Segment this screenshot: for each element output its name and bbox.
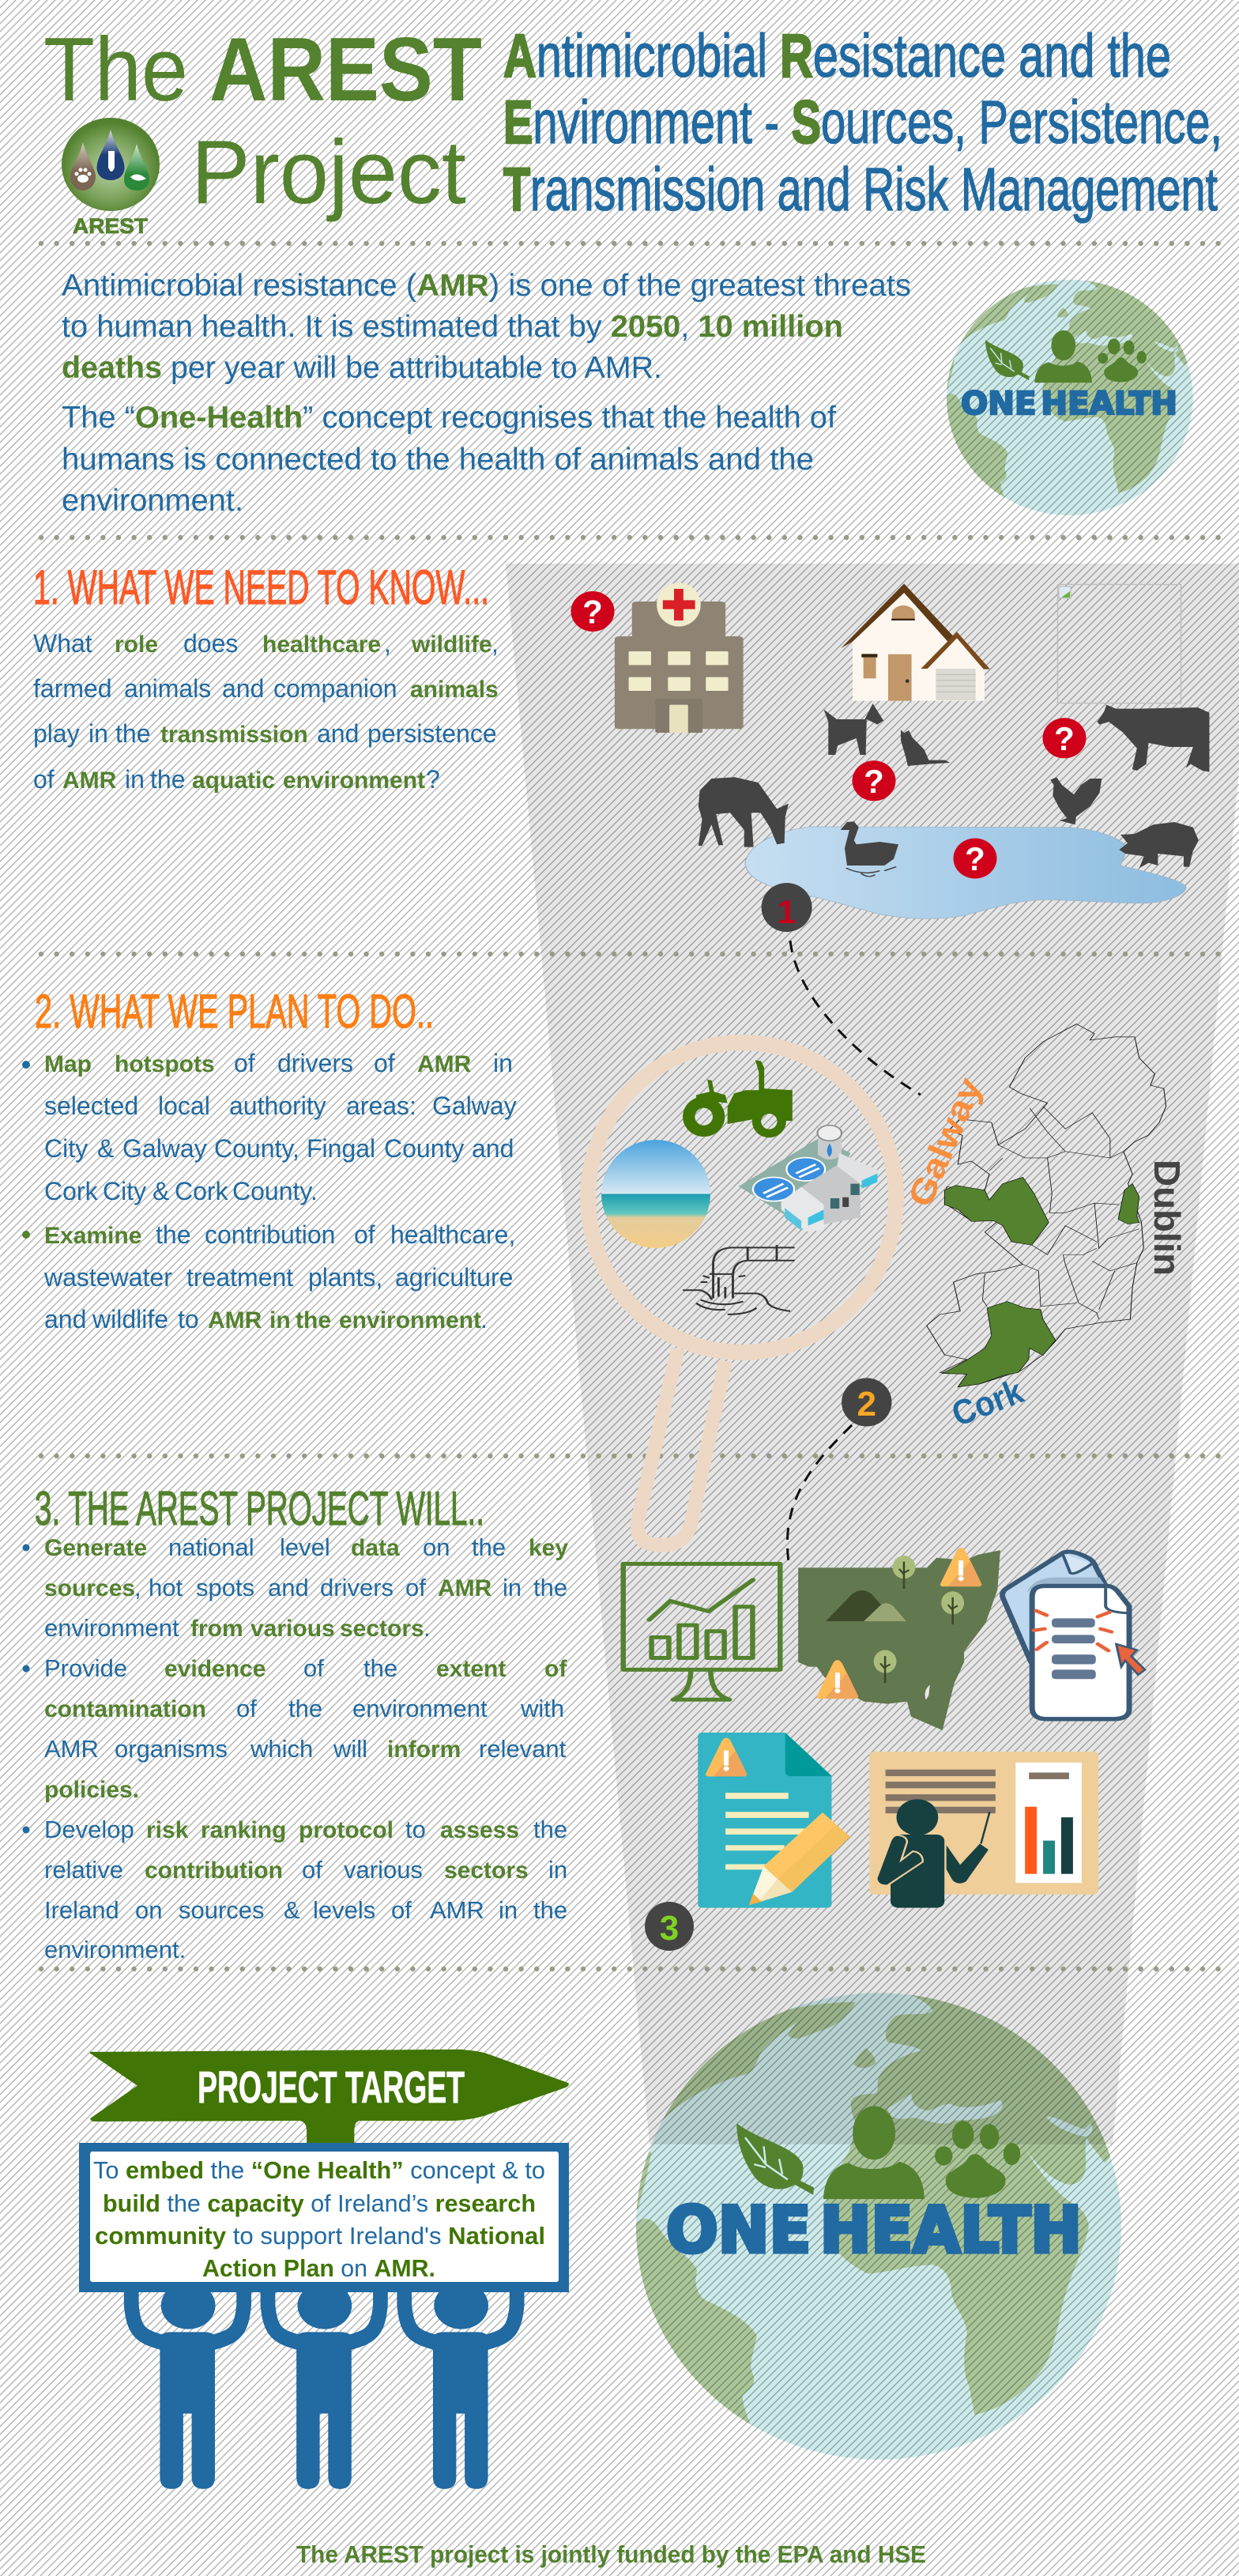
step badge 1: 1 (778, 893, 796, 930)
section 3 bullets: the (533, 1816, 567, 1843)
section 3 bullets: will (333, 1735, 367, 1763)
section 2 bullets: City (44, 1134, 88, 1163)
section 2 bullets: of (234, 1049, 255, 1077)
heading 1: 1. WHAT WE NEED TO KNOW... (33, 560, 489, 614)
section 3 bullets: contribution (145, 1858, 283, 1884)
icon: pig (1119, 822, 1199, 868)
section 2 bullets: authority (229, 1092, 326, 1120)
section 3 bullets: environment (352, 1695, 488, 1722)
section 2 bullets: Map (44, 1051, 92, 1077)
county: Cork (943, 1302, 1056, 1387)
icon: effluent pipe (683, 1245, 795, 1314)
icon: AREST logo (62, 118, 160, 238)
funnel shaded panel (506, 564, 1239, 2144)
section 3 bullets: sources (179, 1896, 265, 1924)
section 3 bullets: environment (44, 1614, 179, 1642)
section 3 bullets: policies. (44, 1777, 139, 1803)
section 2 bullets: the (296, 1307, 331, 1333)
section 3 bullets: AMR (44, 1735, 99, 1763)
section 1 body: transmission (160, 722, 308, 748)
label: project target: PROJECT TARGET (198, 2062, 465, 2113)
broken image placeholder (1057, 585, 1181, 703)
target board: community to support Ireland's National (95, 2222, 545, 2250)
section 1 body: play (33, 719, 80, 748)
section 1 body: , (384, 629, 391, 658)
section 3 bullets: of (405, 1574, 426, 1601)
section 2 bullets: selected (44, 1092, 138, 1120)
map of Ireland (927, 1024, 1166, 1387)
icon: horse (699, 777, 789, 847)
section 2 bullets: AMR (208, 1307, 262, 1333)
section 1 body: does (183, 629, 238, 658)
section 3 bullets: inform (387, 1737, 461, 1763)
illustration: hospital (615, 583, 744, 733)
section 1 body: farmed (33, 674, 112, 703)
section 3 bullets: of (302, 1856, 322, 1884)
section 2 bullets: to (178, 1305, 199, 1333)
section 3 bullets: to (405, 1816, 426, 1843)
step badge 3 (645, 1902, 694, 1951)
section 3 bullets: risk (146, 1817, 189, 1843)
section 2 bullets (22, 1049, 517, 1333)
section 2 bullets: treatment (186, 1263, 293, 1292)
section 3 bullets: various (344, 1856, 423, 1884)
icon: documents with cursor (1003, 1552, 1145, 1719)
section 2 bullets: contribution (205, 1220, 335, 1249)
section 2 bullets: wildlife (92, 1305, 168, 1333)
section 2 bullets: Galway (432, 1092, 517, 1120)
section 3 bullets: the (533, 1574, 567, 1601)
section 3 bullets (22, 1533, 568, 1963)
small globe base (945, 271, 1200, 515)
section 2 bullets: hotspots (115, 1051, 215, 1077)
section 1 body: companion (273, 674, 397, 703)
heading 3: 3. THE AREST PROJECT WILL.. (35, 1482, 484, 1535)
icon: three people holding board (131, 2282, 517, 2489)
icon: beach (601, 1140, 710, 1248)
panel: section 2 what we plan to do (22, 985, 517, 1333)
intro text: environment. (62, 484, 243, 518)
section 1 body: ? (426, 765, 440, 794)
icon: magnifying glass (588, 1043, 896, 1545)
section 1 body: role (115, 632, 158, 658)
section 2 bullets: & (97, 1134, 114, 1163)
section 2 bullets: County, (214, 1134, 299, 1163)
panel: section 1 what we need to know (33, 560, 499, 794)
section 2 bullets: & (153, 1177, 169, 1205)
section 3 bullets: Generate (44, 1535, 147, 1561)
section 2 bullets: Examine (44, 1223, 141, 1249)
section 3 bullets: spots (196, 1574, 254, 1601)
section 1 body: animals (410, 677, 499, 703)
section 3 bullets: level (280, 1533, 330, 1561)
section 2 bullets: environment (339, 1307, 481, 1333)
section 3 bullets: which (250, 1735, 313, 1763)
section 2 bullets: drivers (277, 1049, 353, 1077)
section 3 bullets: relative (44, 1856, 123, 1884)
section 3 bullets: in (503, 1574, 522, 1601)
section 2 bullets: Galway (122, 1134, 207, 1163)
icon: wastewater treatment plant (739, 1126, 879, 1231)
section 2 bullets: AMR (417, 1051, 472, 1077)
section 3 bullets: extent (436, 1656, 506, 1682)
section 3 bullets: levels (313, 1896, 375, 1924)
section 2 bullets: . (480, 1305, 488, 1333)
section 3 bullets: evidence (164, 1656, 266, 1682)
step badge 2: 2 (857, 1385, 876, 1424)
section 3 bullets: the (472, 1533, 506, 1561)
intro text (62, 269, 911, 518)
section 3 bullets: Ireland (44, 1896, 119, 1924)
section 1 body: the (150, 765, 185, 794)
question badges: ? (1054, 720, 1075, 757)
title: The AREST Project: The (43, 20, 188, 120)
illustration: pond with animals (699, 703, 1210, 918)
footer funding note: The AREST project is jointly funded by the EPA and HSE (296, 2540, 926, 2568)
label: Dublin: Dublin (1147, 1160, 1188, 1276)
intro text: deaths per year will be attributable to AMR. (62, 351, 662, 385)
section 2 bullets: agriculture (395, 1263, 513, 1292)
icon: cat (901, 730, 950, 766)
section 3 bullets: national (168, 1533, 254, 1561)
section 3 bullets: drivers (320, 1574, 394, 1601)
section 1 body: of (33, 765, 55, 794)
section 3 bullets: from (190, 1616, 243, 1642)
panel: project target (79, 2050, 569, 2489)
dashed arrow 2 to 3 (787, 1425, 852, 1567)
title: The AREST Project: AREST (209, 20, 482, 120)
section 3 bullets: the (363, 1654, 397, 1682)
icon: AREST logo: AREST (73, 214, 149, 238)
question badges: ? (582, 593, 603, 631)
section 3 bullets: sources (44, 1575, 135, 1601)
section 3 bullets: protocol (299, 1817, 394, 1843)
question badges: ? (864, 763, 884, 800)
section 1 body: the (115, 719, 150, 748)
section 3 bullets: assess (440, 1817, 519, 1843)
section 2 bullets: of (374, 1049, 395, 1077)
section 3 bullets: with (520, 1695, 564, 1722)
section 3 bullets: hot (149, 1574, 183, 1601)
section 1 body: and (222, 674, 264, 703)
section 2 bullets: Fingal (307, 1134, 375, 1163)
section 3 bullets: Develop (44, 1816, 134, 1843)
icon: report with pencil (698, 1733, 850, 1908)
section 2 bullets: and (44, 1305, 86, 1333)
section 2 bullets: of (354, 1220, 375, 1249)
section 3 bullets: the (533, 1896, 567, 1924)
section 1 body: environment (283, 768, 425, 794)
section 3 bullets: of (303, 1654, 324, 1682)
section 2 bullets: plants, (308, 1263, 382, 1292)
section 2 bullets: City (103, 1177, 146, 1205)
illustration: house (841, 583, 990, 701)
section 2 bullets: healthcare, (390, 1220, 515, 1249)
section 3 bullets: & (284, 1896, 300, 1924)
intro text: humans is connected to the health of animals and the (62, 443, 814, 477)
section 3 bullets: in (499, 1896, 518, 1924)
heading 2: 2. WHAT WE PLAN TO DO.. (35, 985, 434, 1038)
label: Galway: Galway (901, 1072, 990, 1213)
section 3 bullets: AMR (430, 1896, 484, 1924)
section 3 bullets: , (134, 1574, 141, 1601)
target board: To embed the “One Health” concept & to (93, 2156, 545, 2184)
label: Cork: Cork (947, 1371, 1029, 1434)
section 1 body: animals (124, 674, 211, 703)
section 3 bullets: various (250, 1616, 335, 1642)
intro text: Antimicrobial resistance ( AMR) is one of the greatest threats (62, 269, 911, 303)
section 1 body: aquatic (192, 768, 275, 794)
section 1 body: healthcare (262, 632, 381, 658)
section 2 bullets: local (158, 1092, 210, 1120)
section 2 bullets: Cork (175, 1177, 229, 1205)
small One Health globe icons (961, 330, 1177, 422)
section 1 body: AMR (62, 768, 117, 794)
intro text: The “One-Health” concept recognises that the health of (62, 401, 836, 435)
section 1 body: What (33, 629, 92, 658)
section 3 bullets: the (288, 1695, 322, 1722)
panel: section 3 the AREST project will (22, 1482, 568, 1963)
icon: risk map (798, 1548, 1000, 1730)
target board: build the capacity of Ireland’s research (103, 2189, 536, 2217)
section 2 bullets: and (472, 1134, 514, 1163)
section 3 bullets: and (268, 1574, 309, 1601)
title: The AREST Project (43, 20, 482, 223)
heading: project full name (503, 22, 1222, 224)
step badge 2 (842, 1378, 892, 1427)
section 1 body: in (125, 765, 145, 794)
section 3 bullets: AMR (438, 1575, 492, 1601)
section 3 bullets: of (544, 1656, 567, 1682)
section 1 body: persistence (367, 719, 497, 748)
icon: presenter with chart (869, 1752, 1098, 1908)
icon: swan (841, 821, 898, 877)
section 2 bullets: wastewater (43, 1263, 172, 1292)
section 3 bullets: organisms (115, 1735, 228, 1763)
section 3 bullets: Provide (44, 1654, 127, 1682)
section 1 body: and (317, 719, 359, 748)
section 2 bullets: the (156, 1220, 190, 1249)
section 3 bullets: key (529, 1535, 568, 1561)
question badges (571, 591, 1086, 879)
step badge 3: 3 (660, 1909, 679, 1948)
section 1 body: wildlife (411, 632, 492, 658)
section 3 bullets: sectors (444, 1858, 529, 1884)
icon: cow (1098, 705, 1210, 772)
icon: green arrow sign (90, 2050, 569, 2145)
icon: rooster (1050, 777, 1102, 824)
target board: Action Plan on AMR. (202, 2254, 435, 2282)
section 2 bullets: County (384, 1134, 464, 1163)
section 3 bullets: of (391, 1896, 412, 1924)
county: Galway (944, 1177, 1049, 1245)
section 3 bullets: relevant (479, 1735, 567, 1763)
section 2 bullets: in (493, 1049, 513, 1077)
icon: monitor with chart (623, 1563, 780, 1699)
section 2 bullets: in (269, 1307, 291, 1333)
section 3 bullets: contamination (44, 1696, 206, 1722)
section 3 bullets: environment. (44, 1936, 186, 1963)
dashed arrow 1 to 2 (790, 941, 921, 1095)
panel: big One Health globe icons (666, 2106, 1082, 2267)
big globe base (632, 1976, 1135, 2460)
icon: tractor (683, 1060, 793, 1137)
panel: big One Health globe icons: ONE HEALTH (666, 2193, 1082, 2267)
section 3 bullets: sectors (340, 1616, 424, 1642)
step badge 1 (762, 883, 812, 932)
small One Health globe icons: ONE HEALTH (961, 386, 1177, 422)
section 3 bullets: on (135, 1896, 162, 1924)
target board (79, 2143, 569, 2292)
section 1 body (33, 629, 499, 794)
icon: dog (823, 703, 883, 755)
section 2 bullets: Cork (44, 1177, 99, 1205)
section 3 bullets: data (351, 1535, 400, 1561)
section 1 body: in (88, 719, 108, 748)
intro text: to human health. It is estimated that by 2050, 10 million (62, 310, 843, 344)
county: Dublin (1118, 1184, 1139, 1224)
section 3 bullets: on (423, 1533, 450, 1561)
section 2 bullets: areas: (346, 1092, 416, 1120)
section 2 bullets: County. (232, 1177, 318, 1205)
section 3 bullets: ranking (201, 1817, 286, 1843)
question badges: ? (965, 840, 985, 877)
section 3 bullets: . (424, 1614, 431, 1642)
section 1 body: , (491, 629, 499, 658)
section 3 bullets: in (548, 1856, 567, 1884)
section 3 bullets: of (236, 1695, 257, 1722)
title: The AREST Project: Project (191, 123, 466, 223)
